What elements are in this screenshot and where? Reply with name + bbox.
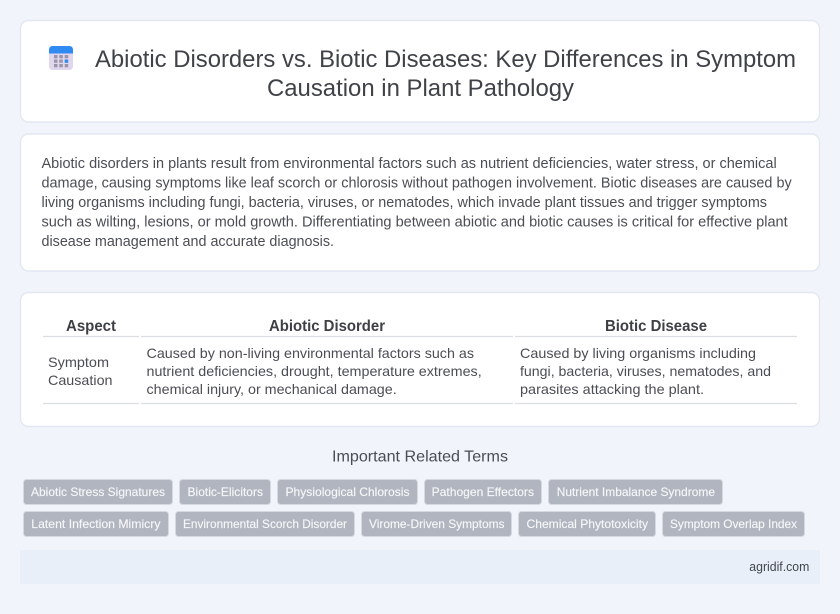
heading: related terms: Important Related Terms xyxy=(332,448,508,466)
tag xyxy=(176,512,354,536)
tag list xyxy=(24,480,804,536)
table cell: aspect: Symptom xyxy=(48,354,109,370)
table cell: biotic disease: fungi, bacteria, viruses, nematodes, and xyxy=(520,363,771,379)
table cell: abiotic disorder xyxy=(146,345,482,397)
title xyxy=(95,46,796,102)
tag xyxy=(278,480,418,504)
table cell: biotic disease: Caused by living organisms including xyxy=(520,345,756,361)
footer: agridif.com xyxy=(749,559,809,574)
tag: Symptom Overlap Index xyxy=(670,517,797,531)
text block: summary: such as wilting, lesions, or mold growth. Differentiating between abiotic and biotic causes is critical for effective plant xyxy=(42,214,788,230)
tag: Abiotic Stress Signatures xyxy=(31,485,165,499)
table header row: Aspect xyxy=(66,318,116,335)
tag xyxy=(518,512,656,536)
table cell: abiotic disorder: Caused by non-living environmental factors such as xyxy=(146,345,474,361)
tag: Virome-Driven Symptoms xyxy=(369,517,504,531)
tag xyxy=(424,480,542,504)
tag: Pathogen Effectors xyxy=(432,485,534,499)
tag xyxy=(24,480,172,504)
text block: summary xyxy=(42,156,792,250)
panel: header xyxy=(20,20,820,122)
tag xyxy=(24,512,168,536)
tag xyxy=(362,512,512,536)
table header row: Biotic Disease xyxy=(605,318,707,335)
panel: summary paragraph xyxy=(20,134,820,271)
tag: Physiological Chlorosis xyxy=(286,485,410,499)
title: Abiotic Disorders vs. Biotic Diseases: Key Differences in Symptom xyxy=(95,46,796,73)
table cell: biotic disease xyxy=(520,345,771,397)
tag xyxy=(180,480,270,504)
table cell: aspect: Causation xyxy=(48,372,112,388)
tag: Nutrient Imbalance Syndrome xyxy=(557,485,715,499)
text block: summary: disease management and accurate diagnosis. xyxy=(42,234,334,250)
table cell: abiotic disorder: nutrient deficiencies, drought, temperature extremes, xyxy=(146,363,482,379)
tag: Environmental Scorch Disorder xyxy=(183,517,347,531)
text block: summary: Abiotic disorders in plants result from environmental factors such as nutrient deficiencies, water stress, or chemical xyxy=(42,156,777,172)
tag: Latent Infection Mimicry xyxy=(31,517,160,531)
footer xyxy=(20,550,820,584)
panel: comparison table xyxy=(20,292,820,426)
table cell: abiotic disorder: chemical injury, or mechanical damage. xyxy=(146,381,397,397)
tag: Chemical Phytotoxicity xyxy=(526,517,648,531)
tag: Biotic-Elicitors xyxy=(188,485,263,499)
text block: summary: living organisms including fungi, bacteria, viruses, or nematodes, which invade plant tissues and trigger symptoms xyxy=(42,195,767,211)
icon: calendar xyxy=(49,46,73,70)
title: Causation in Plant Pathology xyxy=(267,75,574,102)
table cell: aspect xyxy=(48,354,112,388)
tag xyxy=(548,480,722,504)
table header row xyxy=(66,318,707,335)
text block: summary: damage, causing symptoms like leaf scorch or chlorosis without pathogen involvement. Biotic diseases are caused by xyxy=(42,176,792,192)
tag xyxy=(662,512,804,536)
table cell: biotic disease: parasites attacking the plant. xyxy=(520,381,704,397)
table header row: Abiotic Disorder xyxy=(269,318,385,335)
